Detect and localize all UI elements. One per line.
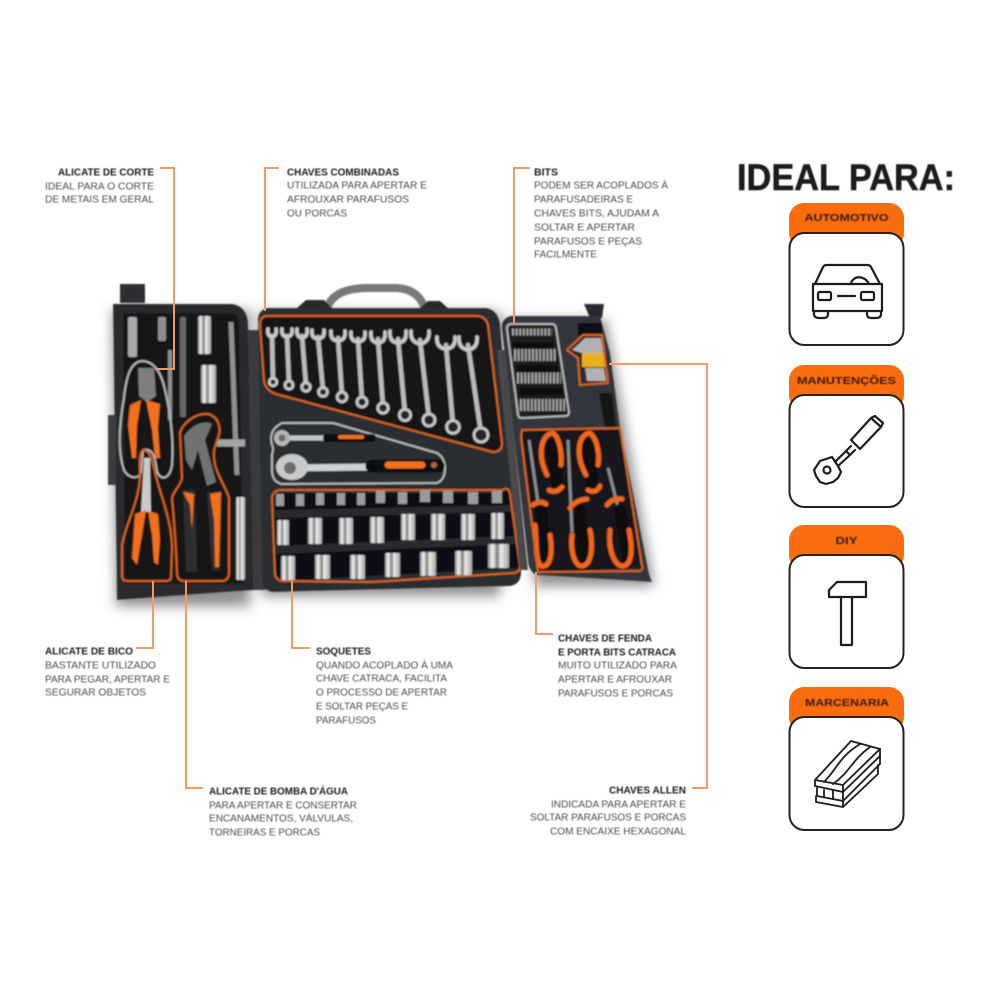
label: chaves allen: CHAVES ALLEN (609, 786, 686, 796)
label: chaves allen: COM ENCAIXE HEXAGONAL (550, 826, 686, 838)
label: alicate de bomba d'agua: TORNEIRAS E PORCAS (209, 826, 320, 838)
wrench tray outline (260, 316, 502, 452)
pliers: water pump (172, 414, 229, 581)
card: automotivo (789, 203, 904, 345)
card: marcenaria: MARCENARIA (805, 697, 889, 709)
label: alicate de corte: DE METAIS EM GERAL (45, 194, 154, 206)
central case panel (258, 308, 521, 592)
card: automotivo: AUTOMOTIVO (804, 212, 888, 224)
card: marcenaria (789, 687, 904, 830)
label: bits: PARAFUSADEIRAS E (534, 194, 633, 206)
label: alicate de bomba d'agua: ALICATE DE BOMBA D'ÁGUA (209, 784, 348, 798)
label: soquetes: E SOLTAR PEÇAS E (316, 700, 408, 712)
label: chaves de fenda: E PORTA BITS CATRACA (558, 648, 676, 658)
label: chaves de fenda: PARAFUSOS E PORCAS (558, 688, 673, 700)
label: soquetes (316, 646, 453, 726)
label: soquetes: SOQUETES (316, 646, 371, 658)
label: chaves combinadas: OU PORCAS (287, 208, 347, 220)
label: alicate de bico (45, 646, 170, 698)
label: soquetes: CHAVE CATRACA, FACILITA (316, 672, 447, 684)
icon: grinder tool (814, 416, 883, 484)
heading: ideal para: IDEAL PARA: (737, 157, 955, 198)
label: chaves combinadas: CHAVES COMBINADAS (287, 168, 399, 178)
allen keys (567, 323, 616, 428)
label: chaves combinadas: AFROUXAR PARAFUSOS (287, 194, 409, 206)
label: alicate de corte: IDEAL PARA O CORTE (45, 180, 154, 192)
screwdriver tray (521, 428, 643, 572)
label: alicate de corte: ALICATE DE CORTE (58, 168, 154, 178)
label: chaves allen: SOLTAR PARAFUSOS E PORCAS (530, 812, 686, 824)
label: bits: PARAFUSOS E PEÇAS (534, 236, 642, 248)
icon: car (813, 265, 882, 318)
label: soquetes: PARAFUSOS (316, 714, 376, 726)
bits holder (507, 324, 570, 418)
label: alicate de bomba d'agua (209, 784, 357, 838)
label: alicate de bico: PARA PEGAR, APERTAR E (45, 674, 170, 686)
pliers: long nose (122, 450, 172, 581)
label: alicate de bico: SEGURAR OBJETOS (45, 686, 146, 698)
card: diy (789, 525, 904, 668)
label: bits: BITS (534, 168, 558, 178)
card: manutencoes (789, 365, 904, 507)
card: manutencoes: MANUTENÇÕES (797, 374, 896, 387)
label: alicate de bomba d'agua: ENCANAMENTOS, VÁLVULAS, (209, 812, 353, 824)
card: diy: DIY (836, 535, 858, 547)
socket tray outline (272, 489, 520, 582)
label: chaves de fenda (558, 634, 677, 700)
combination wrenches (268, 329, 488, 442)
label: alicate de bomba d'agua: PARA APERTAR E CONSERTAR (209, 800, 357, 812)
ratchet tray outline (271, 423, 445, 484)
label: chaves de fenda: MUITO UTILIZADO PARA (558, 660, 677, 672)
label: bits (534, 168, 668, 260)
right case panel (497, 304, 652, 582)
label: soquetes: QUANDO ACOPLADO À UMA (316, 658, 453, 672)
label: bits: CHAVES BITS, AJUDAM A (534, 208, 659, 220)
sockets (276, 490, 509, 580)
icon: hammer (829, 582, 866, 645)
left case panel (108, 284, 266, 600)
carrying handle (297, 288, 450, 310)
label: chaves combinadas: UTILIZADA PARA APERTAR E (287, 180, 427, 192)
small sockets and bars (128, 316, 245, 580)
case shadow (112, 310, 654, 606)
label: chaves de fenda: CHAVES DE FENDA (558, 634, 652, 644)
label: chaves allen: INDICADA PARA APERTAR E (551, 798, 686, 810)
label: chaves combinadas (287, 168, 427, 220)
ratchets (274, 430, 438, 480)
label: bits: PODEM SER ACOPLADOS À (534, 178, 668, 192)
label: bits: SOLTAR E APERTAR (534, 222, 635, 234)
label: soquetes: O PROCESSO DE APERTAR (316, 686, 447, 698)
label: alicate de corte (45, 168, 154, 206)
label: chaves de fenda: APERTAR E AFROUXAR (558, 674, 672, 686)
toolkit case photo (108, 284, 654, 606)
label: alicate de bico: BASTANTE UTILIZADO (45, 660, 156, 672)
icon: wood planks (815, 741, 880, 807)
leader lines (136, 168, 707, 788)
pliers: cutting (120, 361, 173, 478)
label: bits: FACILMENTE (534, 248, 597, 260)
label: chaves allen (530, 786, 686, 838)
label: alicate de bico: ALICATE DE BICO (45, 646, 133, 658)
